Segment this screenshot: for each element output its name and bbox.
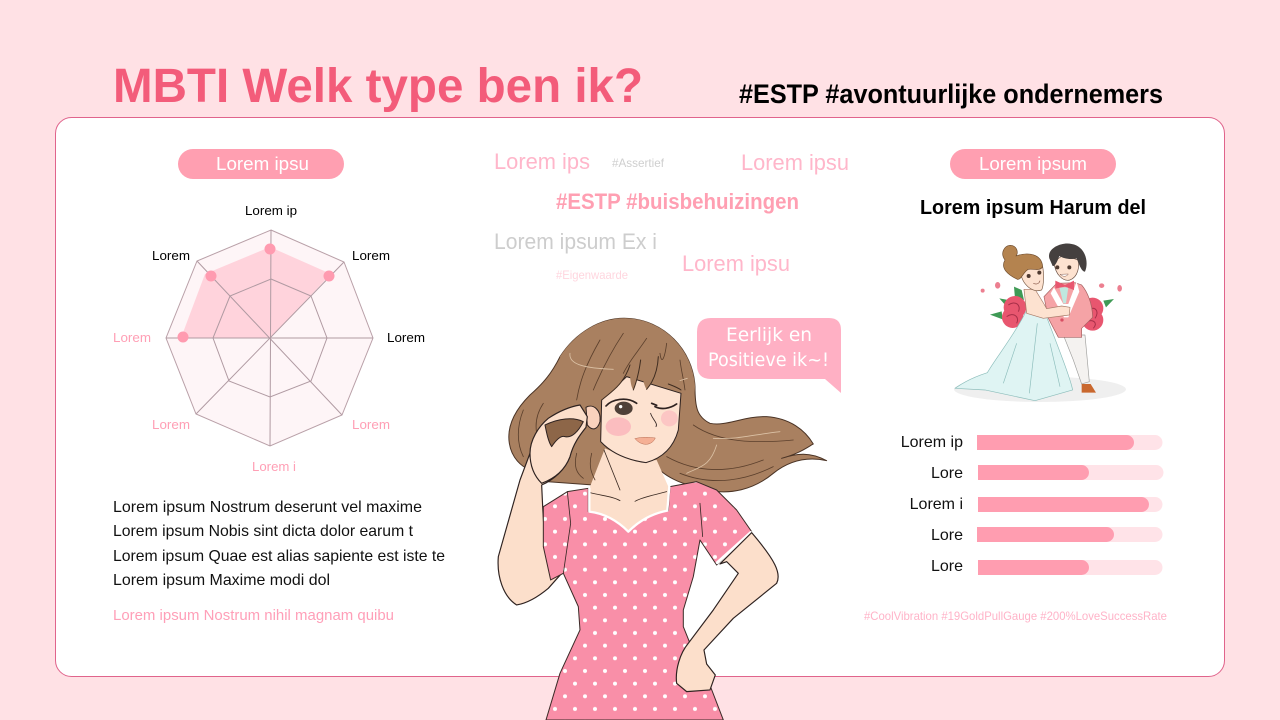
right pill heading: Lorem ipsum xyxy=(979,154,1087,174)
right hashtag line: #CoolVibration #19GoldPullGauge #200%LoveSuccessRate xyxy=(864,609,1167,623)
left body text xyxy=(113,499,445,589)
radar axis labels: Lorem xyxy=(352,248,390,263)
radar axis labels: Lorem ip xyxy=(245,203,297,218)
bar chart xyxy=(901,434,1163,575)
keyword cloud: #ESTP #buisbehuizingen xyxy=(556,189,799,214)
speech bubble xyxy=(697,318,841,393)
left pink note: Lorem ipsum Nostrum nihil magnam quibu xyxy=(113,607,394,624)
ear and hand xyxy=(586,406,600,429)
radar axis labels xyxy=(113,203,425,474)
radar axis labels: Lorem xyxy=(352,417,390,432)
main white panel xyxy=(56,118,1224,676)
radar axis labels: Lorem xyxy=(152,417,190,432)
roses xyxy=(990,287,1114,331)
bar labels: Lore xyxy=(931,465,963,482)
illustration: girl winking xyxy=(498,318,827,720)
speech bubble: Eerlijk en xyxy=(726,324,812,346)
bar labels: Lore xyxy=(931,527,963,544)
left body text: Lorem ipsum Maxime modi dol xyxy=(113,572,330,589)
right heading: Lorem ipsum Harum del xyxy=(920,197,1146,219)
radar axis labels: Lorem xyxy=(113,330,151,345)
groom head xyxy=(1054,255,1079,280)
nose and mouth xyxy=(651,413,656,427)
bar labels: Lore xyxy=(931,558,963,575)
left body text: Lorem ipsum Nobis sint dicta dolor earum t xyxy=(113,523,414,540)
groom jacket xyxy=(1044,283,1093,337)
neck xyxy=(590,448,668,532)
keyword cloud: Lorem ips xyxy=(494,149,590,174)
bar labels xyxy=(901,434,963,575)
title: MBTI Welk type ben ik? xyxy=(113,60,643,113)
illustration: wedding couple xyxy=(954,244,1126,402)
radar axis labels: Lorem xyxy=(387,330,425,345)
radar data points xyxy=(178,244,334,342)
left pill heading: Lorem ipsu xyxy=(216,154,309,174)
keyword cloud: Lorem ipsum Ex i xyxy=(494,229,657,254)
subtitle hashtag: #ESTP #avontuurlijke ondernemers xyxy=(739,79,1163,109)
ground shadow xyxy=(954,377,1126,402)
raised left arm xyxy=(498,453,570,605)
face xyxy=(601,377,681,463)
keyword cloud: #Assertief xyxy=(612,156,665,170)
keyword cloud: #Eigenwaarde xyxy=(556,268,628,282)
right pill heading xyxy=(950,149,1116,179)
keyword cloud: Lorem ipsu xyxy=(741,150,849,175)
bar labels: Lorem ip xyxy=(901,434,963,451)
fringe xyxy=(560,318,695,410)
eyes xyxy=(615,402,633,415)
hair strands xyxy=(518,333,793,481)
back hair xyxy=(509,318,827,492)
speech bubble: Positieve ik~! xyxy=(708,349,829,371)
left pill heading xyxy=(178,149,344,179)
bride dress xyxy=(955,310,1073,401)
petals xyxy=(981,282,1122,293)
keyword cloud xyxy=(494,149,849,282)
radar data area xyxy=(181,247,331,338)
right arm on hip xyxy=(676,533,778,692)
groom trousers and shoe xyxy=(1063,335,1089,384)
left body text: Lorem ipsum Nostrum deserunt vel maxime xyxy=(113,499,422,516)
left body text: Lorem ipsum Quae est alias sapiente est iste te xyxy=(113,548,445,565)
keyword cloud: Lorem ipsu xyxy=(682,251,790,276)
bride head xyxy=(1021,263,1044,291)
bride body and arm xyxy=(1024,289,1070,318)
radar axis labels: Lorem i xyxy=(252,459,296,474)
bar fills xyxy=(977,435,1149,575)
radar axis labels: Lorem xyxy=(152,248,190,263)
cheeks xyxy=(606,417,631,436)
dress xyxy=(543,482,752,720)
radar chart xyxy=(113,203,425,474)
bar tracks xyxy=(977,435,1163,575)
bar labels: Lorem i xyxy=(910,496,963,513)
